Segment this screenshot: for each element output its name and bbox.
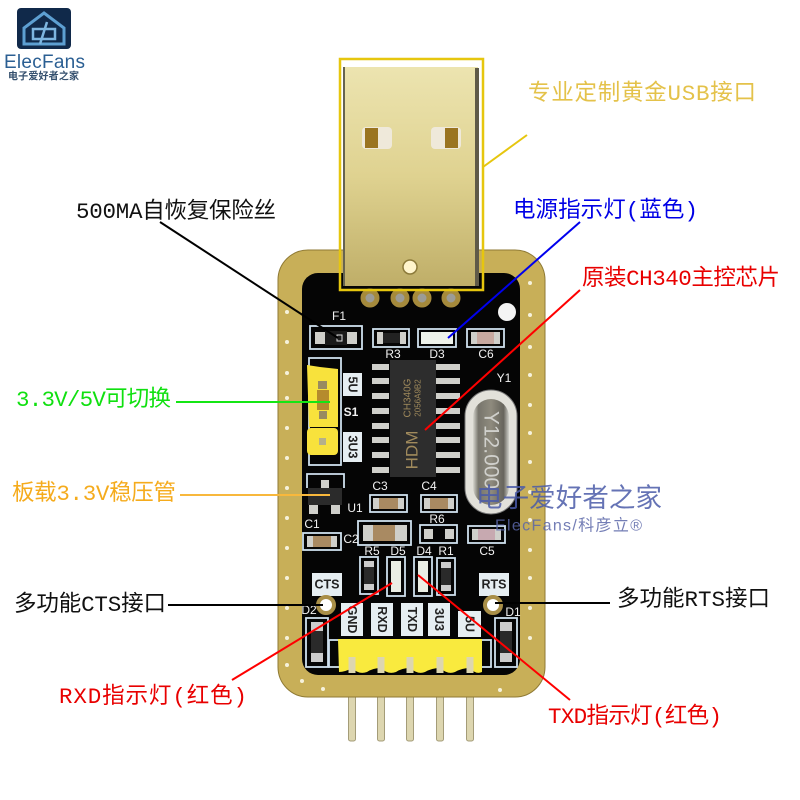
LEDs and resistors lower: D5 [390,544,406,558]
CH340G chip: HDM [402,431,422,469]
crystal Y1 [465,390,517,514]
regulator U1 [307,474,363,515]
diodes D1 D2: D1 [505,605,521,619]
yellow pin header [329,639,491,673]
pin labels: TXD [405,607,419,632]
CTS pad [312,573,342,613]
component outlines and labels: D3 [429,347,445,361]
logo: ElecFans: ElecFans [4,52,85,73]
callout: fuse [76,198,338,338]
logo: ElecFans [4,8,85,82]
capacitors and resistors middle: C1 [304,517,320,531]
pin labels: RXD [375,606,389,633]
edge vias [285,281,532,692]
CH340G chip: CH340G [402,378,414,417]
module photo: CH340 USB board [278,67,545,741]
callout: RXD LED: RXD指示灯(红色) [59,683,247,710]
component outlines and labels: Y1 [497,371,512,385]
callout: USB connector [340,59,756,290]
switch S1 jumper: 5U [346,377,360,392]
pin labels [341,603,481,637]
component outlines and labels: C6 [478,347,494,361]
pin labels: 3U3 [432,608,446,631]
USB connector shell [343,67,479,286]
RTS pad [479,573,509,613]
LEDs and resistors lower [360,544,455,596]
callout: TXD LED [418,575,722,730]
pin labels: GND [345,606,359,633]
pin header pins [348,655,474,741]
callout: CH340 chip: 原装CH340主控芯片 [582,265,780,292]
component outlines and labels: R3 [385,347,401,361]
switch S1 jumper: S1 [344,405,359,419]
capacitors and resistors middle: C5 [479,544,495,558]
capacitors and resistors middle: C3 [372,479,388,493]
capacitors and resistors middle: R6 [429,512,445,526]
component outlines and labels: F1 [332,309,346,323]
callout: voltage switch: 3.3V/5V可切换 [16,386,171,413]
switch S1 jumper [307,358,362,465]
callout: power LED [448,197,698,338]
callout: regulator: 板载3.3V稳压管 [12,480,176,507]
callout: RTS: 多功能RTS接口 [617,586,770,613]
switch S1 jumper: 3U3 [346,436,360,459]
capacitors and resistors middle: C4 [421,479,437,493]
component outlines and labels [310,309,512,385]
diodes D1 D2: D2 [301,603,317,617]
watermark: ElecFans/科彦立® [495,516,642,534]
callout: CTS: 多功能CTS接口 [14,591,166,618]
callout: RXD LED [59,583,392,710]
logo: ElecFans: 电子爱好者之家 [8,70,79,82]
diodes D1 D2 [301,603,521,667]
USB through holes [363,291,458,305]
regulator U1: U1 [347,501,363,515]
callout: CH340 chip [425,265,780,430]
LEDs and resistors lower: D4 [416,544,432,558]
capacitors and resistors middle [303,479,505,558]
callout: TXD LED: TXD指示灯(红色) [548,703,722,730]
black PCB area [302,273,520,675]
LEDs and resistors lower: R5 [364,544,380,558]
LEDs and resistors lower: R1 [438,544,454,558]
watermark: 电子爱好者之家 [476,484,662,515]
gold PCB edge [278,250,545,697]
capacitors and resistors middle: C2 [343,532,359,546]
CH340G chip [372,360,460,477]
pin labels: 5U [462,616,476,632]
callout: USB connector: 专业定制黄金USB接口 [528,80,756,107]
callout: fuse: 500MA自恢复保险丝 [76,198,276,225]
CTS pad: CTS [314,578,340,592]
CH340G chip: 2056A9B2 [414,379,422,417]
RTS pad: RTS [482,578,506,592]
watermark [476,484,662,534]
callout: power LED: 电源指示灯(蓝色) [513,197,698,224]
crystal Y1: Y12.000 [480,411,502,489]
